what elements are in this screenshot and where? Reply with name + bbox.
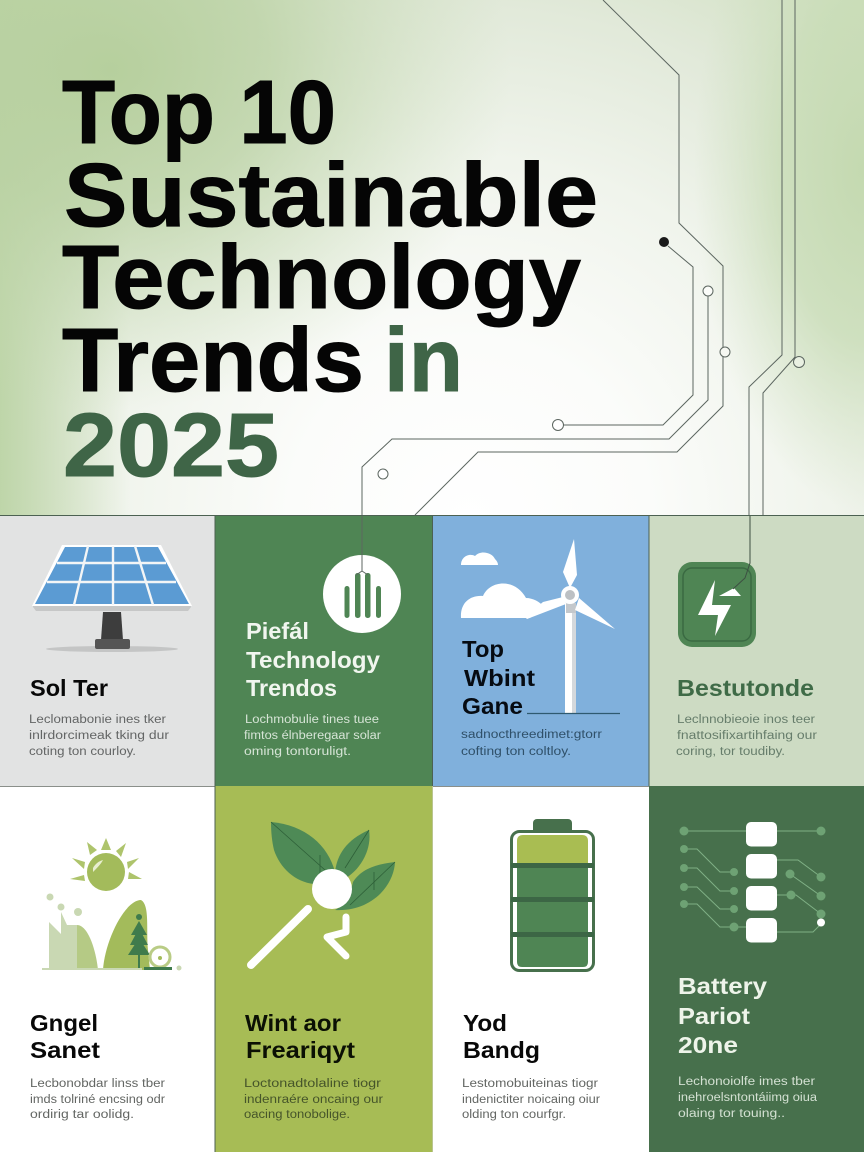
text: network body: Lechonoiolfe imes tber xyxy=(678,1076,815,1088)
icon: circuit nodes xyxy=(680,822,826,942)
text: landscape body: Lecbonobdar linss tber xyxy=(30,1078,165,1090)
panel: technology trends card xyxy=(215,515,432,786)
heading: battery xyxy=(463,1010,540,1063)
text: technology body: Lochmobulie tines tuee xyxy=(245,714,379,726)
heading: leaf: Wint aor xyxy=(245,1010,341,1036)
text: wind body xyxy=(461,729,602,758)
heading: landscape: Sanet xyxy=(30,1037,100,1063)
heading: leaf xyxy=(245,1010,355,1063)
title: 2025 xyxy=(63,396,279,496)
heading: network xyxy=(678,973,767,1058)
text: energy body: coring, tor toudiby. xyxy=(676,746,785,758)
text: battery body xyxy=(462,1078,600,1121)
text: technology body xyxy=(244,714,381,758)
heading: technology trends: Trendos xyxy=(246,675,337,701)
heading: technology trends: Piefál xyxy=(246,618,309,644)
icon: lightning bolt xyxy=(678,562,756,647)
title: Trends xyxy=(62,311,364,411)
heading: leaf: Freariqyt xyxy=(246,1037,355,1063)
heading: energy: Bestutonde xyxy=(677,675,814,701)
heading: technology trends xyxy=(246,618,380,701)
card grid lines xyxy=(0,515,864,1152)
text: landscape body: ordirig tar oolidg. xyxy=(30,1109,134,1121)
title: Technology xyxy=(62,228,581,328)
text: leaf body: indenraére oncaing our xyxy=(244,1094,383,1106)
icon: bars in circle xyxy=(323,515,401,633)
icon: solar panel xyxy=(32,545,192,652)
panel: wind card xyxy=(432,515,649,786)
text: battery body: Lestomobuiteinas tiogr xyxy=(462,1078,598,1090)
heading: wind: Wbint xyxy=(464,665,535,691)
text: leaf body: Loctonadtolaline tiogr xyxy=(244,1078,381,1090)
text: battery body: indenictiter noicaing oiur xyxy=(462,1094,600,1106)
text: leaf body xyxy=(244,1078,383,1121)
text: energy body xyxy=(676,714,817,758)
title: Sustainable xyxy=(64,146,598,246)
text: network body: inehroelsntontáiimg oiua xyxy=(678,1092,818,1104)
icon: leaves and node xyxy=(251,822,395,965)
text: battery body: olding ton courfgr. xyxy=(462,1109,566,1121)
panel: header background xyxy=(0,0,864,516)
heading: battery: Yod xyxy=(463,1010,507,1036)
title: in xyxy=(384,311,463,411)
panel: battery card xyxy=(432,786,649,1152)
panel: network card xyxy=(649,786,864,1152)
circuit lines into cards xyxy=(733,515,750,589)
heading: landscape xyxy=(30,1010,100,1063)
icon: sun and landscape xyxy=(42,838,182,970)
icon: battery xyxy=(511,819,594,970)
text: wind body: sadnocthreedimet:gtorr xyxy=(461,729,602,741)
panel: energy card xyxy=(649,515,864,786)
panel: landscape card xyxy=(0,786,215,1152)
heading: wind xyxy=(462,636,535,719)
panel: leaf card xyxy=(215,786,432,1152)
text: technology body: oming tontoruligt. xyxy=(244,746,351,758)
text: landscape body: imds tolriné encsing odr xyxy=(30,1094,165,1106)
circuit lines in header xyxy=(362,0,804,515)
icon: clouds xyxy=(461,552,543,618)
icon: wind turbine xyxy=(525,539,615,714)
heading: wind: Gane xyxy=(462,693,523,719)
heading: network: Pariot xyxy=(678,1003,750,1029)
text: solar body: Leclomabonie ines tker xyxy=(29,714,166,726)
heading: network: Battery xyxy=(678,973,767,999)
text: landscape body xyxy=(30,1078,165,1121)
panel: solar card xyxy=(0,515,215,786)
text: wind body: cofting ton coltloy. xyxy=(461,746,571,758)
text: leaf body: oacing tonobolige. xyxy=(244,1109,350,1121)
heading: solar: Sol Ter xyxy=(30,675,108,701)
heading: wind: Top xyxy=(462,636,504,662)
heading: technology trends: Technology xyxy=(246,647,380,673)
text: solar body: coting ton courloy. xyxy=(29,746,136,758)
title xyxy=(62,63,598,496)
text: energy body: fnattosifixartihfaing our xyxy=(677,730,817,742)
heading: landscape: Gngel xyxy=(30,1010,98,1036)
text: energy body: Leclnnobieoie inos teer xyxy=(677,714,815,726)
text: solar body: inlrdorcimeak tking dur xyxy=(29,730,169,742)
text: solar body xyxy=(29,714,169,758)
text: technology body: fimtos élnberegaar solar xyxy=(244,730,381,742)
text: network body xyxy=(678,1076,818,1120)
title: Top 10 xyxy=(62,63,336,163)
heading: battery: Bandg xyxy=(463,1037,540,1063)
heading: network: 20ne xyxy=(678,1032,738,1058)
text: network body: olaing tor touing.. xyxy=(678,1108,785,1120)
